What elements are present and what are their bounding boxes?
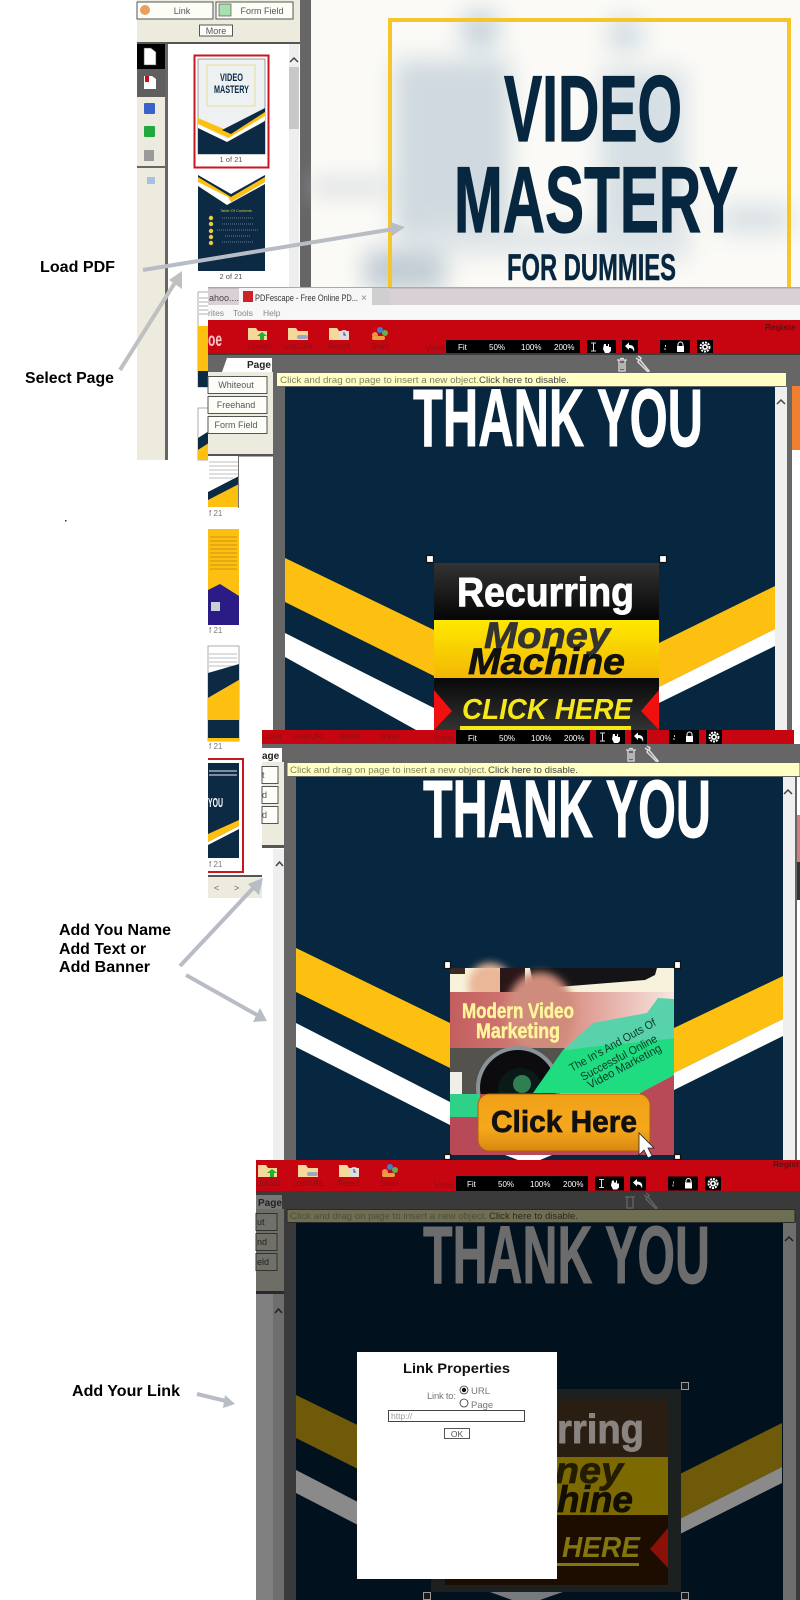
- cover title: VIDEO: VIDEO: [504, 56, 682, 161]
- red toolbar: [256, 1159, 800, 1191]
- trash and wrench icons: [626, 746, 658, 762]
- browser menu bar: Help: [263, 308, 281, 318]
- yellow hint bar: [276, 372, 786, 386]
- document page: [285, 373, 775, 740]
- selection handles: [444, 962, 680, 1160]
- link type options: Page: [471, 1400, 493, 1411]
- page thumbnail 4 edge: [198, 408, 210, 460]
- orange Click Here button: Click Here: [491, 1104, 637, 1139]
- arrow: add items to page: [186, 975, 267, 1022]
- dimmed tool panel: nd: [257, 1237, 267, 1247]
- dimmed banner: [431, 1389, 681, 1592]
- red toolbar: oe: [208, 330, 222, 351]
- mouse cursor: [639, 1133, 654, 1158]
- thumbnail 6 selected: YOU: [208, 795, 223, 810]
- red toolbar: View: [434, 1180, 454, 1190]
- label: Add You Name / Text / Banner: Add Banner: [59, 959, 150, 976]
- thumbnail 3 tail: f 21: [209, 509, 223, 518]
- thumbnail 6 selected: f 21: [209, 860, 223, 869]
- dimmed hint bar: [287, 1210, 795, 1222]
- red toolbar: Recent: [328, 342, 351, 351]
- panel: PDF viewer with cover page: [137, 0, 800, 460]
- label: Add You Name / Text / Banner: Add Text or: [59, 941, 146, 958]
- URL input: http://: [391, 1411, 413, 1421]
- red toolbar: Upload: [256, 1179, 280, 1188]
- dimmed banner: rring: [557, 1406, 644, 1452]
- browser menu bar: [208, 305, 800, 320]
- red toolbar: [208, 320, 800, 354]
- dimmed selection handles: [424, 1382, 688, 1600]
- yellow hint bar: Click and drag on page to insert a new object.: [290, 765, 487, 776]
- link type options: Link to:: [427, 1391, 456, 1402]
- thumbnail 4: [208, 529, 239, 635]
- red toolbar strip: Load URL: [293, 732, 326, 741]
- page thumbnail 1 selected: [194, 56, 268, 168]
- dimmed banner: hine: [557, 1479, 633, 1520]
- red toolbar: 50%: [489, 343, 505, 352]
- tool panel: Page tab: Form Field: [214, 420, 258, 430]
- tool panel: Page tab: Freehand: [217, 400, 255, 410]
- thumbnail 4: f 21: [209, 626, 223, 635]
- link type options: URL: [471, 1386, 490, 1397]
- diagonal tagline: Successful Online: [579, 1033, 659, 1084]
- trash and wrench icons: [617, 356, 649, 372]
- browser tab strip: PDFescape - Free Online PD...: [255, 293, 358, 304]
- red toolbar: 100%: [530, 1180, 550, 1189]
- banner heading second line: Marketing: [476, 1020, 560, 1043]
- red toolbar: Registe: [765, 322, 796, 332]
- scroll column: [775, 387, 787, 730]
- dimmed tool panel: Page: [258, 1198, 282, 1209]
- sidebar tool button: More: [200, 25, 232, 36]
- document page: [296, 764, 783, 1160]
- thumbnail pager: <: [214, 883, 219, 893]
- page thumbnail 2: Table Of Contents: [220, 208, 252, 213]
- tool panel: Page tab: Whiteout: [218, 380, 254, 390]
- page thumbnail 1 selected: VIDEO: [220, 72, 243, 84]
- red toolbar strip: Recent: [338, 732, 361, 741]
- banner: Recurring Money Machine: Money: [484, 615, 613, 656]
- dimmed trash and wrench icons: [625, 1193, 657, 1209]
- panel: thumbnail strip continuation: [208, 456, 262, 898]
- red toolbar: Share: [380, 1179, 400, 1188]
- red toolbar: 100%: [521, 343, 541, 352]
- yellow hint bar: [287, 762, 800, 776]
- thumbnail pager: >: [234, 883, 239, 893]
- link type options: [427, 1386, 493, 1411]
- dimmed hint bar: Click and drag on page to insert a new object.: [290, 1211, 487, 1222]
- work area gray: [262, 744, 800, 762]
- thumbnail 5: f 21: [209, 742, 223, 751]
- banner: Recurring Money Machine: Recurring: [457, 569, 634, 615]
- page thumbnail 2: 2 of 21: [220, 272, 242, 281]
- diagonal tagline: The In's And Outs Of: [568, 1017, 659, 1075]
- browser menu bar: Tools: [233, 308, 253, 318]
- page thumbnail 3 edge: [198, 292, 210, 387]
- thumbnail scrollbar: [289, 44, 299, 460]
- OK button: [444, 1428, 470, 1439]
- page thumbnail 1 selected: MASTERY: [214, 84, 249, 96]
- sidebar tool button: Form Field: [216, 2, 293, 19]
- thumbnail pager: [208, 875, 262, 898]
- red toolbar strip: 100%: [531, 734, 551, 743]
- red toolbar strip: 50%: [499, 734, 515, 743]
- red toolbar: 200%: [554, 343, 574, 352]
- tool panel: Page tab: t: [262, 770, 265, 780]
- browser tab strip: [208, 287, 800, 305]
- red toolbar: Share: [370, 342, 390, 351]
- red toolbar: Fit: [467, 1180, 477, 1189]
- tool panel: Page tab: [208, 355, 273, 456]
- label: Load PDF: Load PDF: [40, 259, 115, 276]
- diagonal tagline: Video Marketing: [586, 1043, 664, 1092]
- red toolbar strip: Share: [380, 732, 400, 741]
- thumbnail 6 selected: [208, 759, 243, 872]
- dialog: Link Properties: [357, 1352, 557, 1579]
- browser menu bar: rites: [208, 308, 224, 318]
- red toolbar: 50%: [498, 1180, 514, 1189]
- banner: Recurring Money Machine: Machine: [468, 641, 625, 682]
- cover page background photo: [312, 10, 790, 290]
- dialog title: Link Properties: [403, 1360, 510, 1376]
- banner: Modern Video Marketing: [450, 963, 674, 1158]
- label: Select Page: Select Page: [25, 370, 114, 387]
- dimmed banner: ney: [555, 1450, 626, 1491]
- browser tab strip: ahoo....: [209, 293, 239, 303]
- tool panel: Page tab: d: [262, 790, 267, 800]
- arrow: add items up to tool panel: [180, 878, 263, 966]
- sidebar tool button: Link: Link: [174, 6, 191, 16]
- thumbnail 3 tail: [208, 456, 239, 518]
- orange page-edge tab: [792, 386, 800, 450]
- dimmed right scroll: [783, 1222, 796, 1600]
- browser tab strip: ×: [361, 293, 367, 304]
- label: Add Your Link: Add Your Link: [72, 1383, 180, 1400]
- label: Add You Name / Text / Banner: Add You Name: [59, 922, 171, 939]
- yellow hint bar: Click here to disable.: [488, 765, 578, 776]
- camera lens: [476, 1046, 560, 1094]
- red toolbar: View: [425, 343, 446, 353]
- page thumbnail 2: [198, 175, 265, 281]
- red toolbar: Regist: [773, 1159, 799, 1169]
- tool panel: Page tab: d: [262, 810, 267, 820]
- sidebar tool button: Form Field: Form Field: [240, 6, 284, 16]
- yellow hint bar: Click and drag on page to insert a new object.: [280, 375, 479, 386]
- red toolbar strip: pload: [262, 732, 282, 741]
- banner heading: Modern Video: [462, 1000, 574, 1023]
- orange Click Here button: [478, 1094, 650, 1151]
- panel: browser window with Link Properties dialog: [256, 1159, 800, 1600]
- page thumbnail 1 selected: 1 of 21: [220, 155, 242, 164]
- red toolbar: 200%: [563, 1180, 583, 1189]
- red toolbar strip: Fit: [468, 734, 478, 743]
- red toolbar strip: 200%: [564, 734, 584, 743]
- selection handles: [426, 556, 666, 562]
- dimmed tool panel: [256, 1195, 284, 1600]
- vertical icon rail: [137, 44, 168, 460]
- red toolbar: Upload: [247, 342, 271, 351]
- panel: browser window with Modern Video Marketing banner: [262, 730, 800, 1160]
- yellow hint bar: Click here to disable.: [479, 375, 569, 386]
- red toolbar: Recent: [338, 1179, 361, 1188]
- scroll columns: [273, 776, 800, 1160]
- dimmed hint bar: Click here to disable.: [489, 1211, 578, 1222]
- dimmed tool panel: ut: [257, 1217, 265, 1227]
- red toolbar: Load URL: [283, 342, 316, 351]
- arrow: Load PDF to cover: [143, 222, 405, 270]
- cover gold frame: [390, 20, 789, 310]
- red toolbar: Fit: [458, 343, 468, 352]
- OK button: OK: [451, 1429, 463, 1439]
- small dot mark: [65, 520, 66, 522]
- work area gray background: [273, 354, 800, 730]
- banner: Recurring Money Machine: [434, 563, 659, 730]
- red toolbar strip: [262, 730, 794, 744]
- URL input: [388, 1410, 524, 1422]
- dimmed tool panel: eld: [257, 1257, 269, 1267]
- dimmed document page: [296, 1210, 783, 1600]
- cover subtitle: FOR DUMMIES: FOR DUMMIES: [507, 247, 676, 288]
- panel: browser window with Recurring Money Machine banner: [208, 287, 800, 740]
- red toolbar strip: View: [434, 733, 454, 743]
- tool panel: Page tab: age: [262, 751, 280, 762]
- sidebar tool button: Link: [137, 2, 213, 19]
- thumbnail 5: [208, 646, 239, 751]
- banner: Recurring Money Machine: CLICK HERE: [462, 694, 634, 726]
- sidebar tool button: More: More: [206, 26, 226, 36]
- red toolbar: Load URL: [293, 1179, 326, 1188]
- arrow: Select Page to thumbnails: [120, 271, 182, 370]
- tool panel: Page tab: [262, 748, 284, 848]
- tool panel: Page tab: Page: [247, 360, 271, 371]
- label: Add You Name / Text / Banner: [59, 922, 171, 976]
- arrow: Add Your Link to dialog: [197, 1394, 235, 1408]
- dimmed banner: HERE: [562, 1532, 642, 1564]
